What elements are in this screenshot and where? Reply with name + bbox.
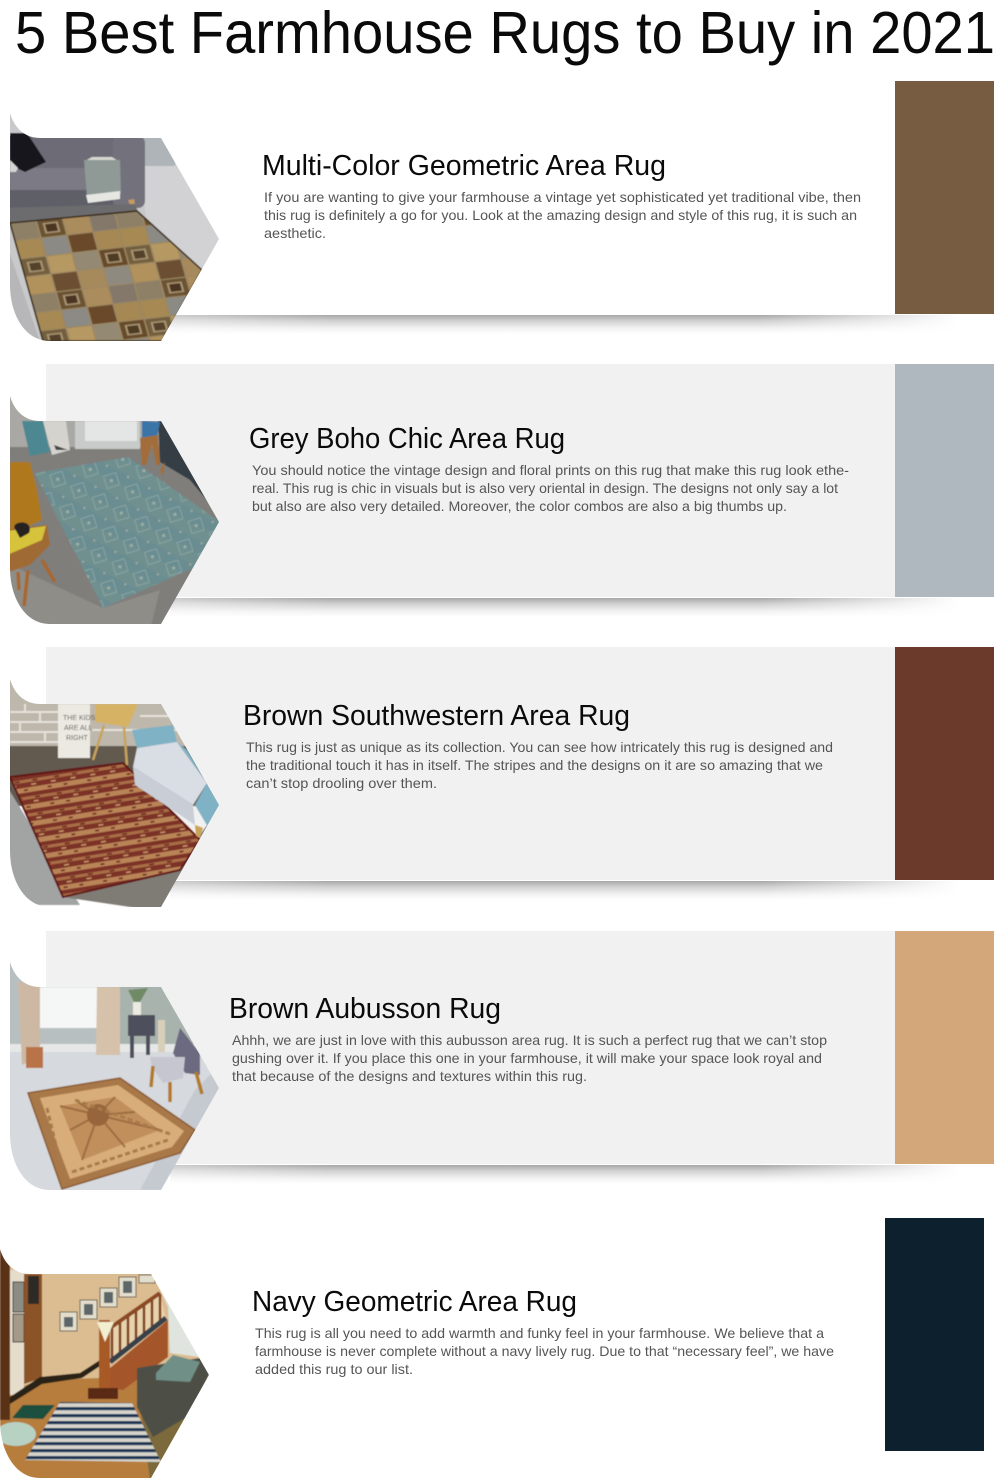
description: You should notice the vintage design and floral prints on this rug that make this rug look ethe- — [252, 462, 849, 478]
description: the traditional touch it has in itself. The stripes and the designs on it are so amazing that we — [246, 757, 823, 773]
description: farmhouse is never complete without a navy lively rug. Due to that “necessary feel”, we have — [255, 1343, 834, 1359]
panel: Multi-Color Geometric Area Rug — [0, 81, 994, 345]
description: but also are also very detailed. Moreover, the color combos are also a big thumbs up. — [252, 498, 787, 514]
description: This rug is just as unique as its collection. You can see how intricately this rug is designed and — [246, 739, 833, 755]
description: aesthetic. — [264, 225, 326, 241]
description: added this rug to our list. — [255, 1361, 413, 1377]
description: If you are wanting to give your farmhouse a vintage yet sophisticated yet traditional vibe, then — [264, 189, 861, 205]
panel shadow — [170, 881, 940, 896]
rug photo: aubusson rug — [10, 962, 219, 1190]
heading: Grey Boho Chic Area Rug — [249, 423, 565, 455]
panel shadow — [170, 315, 940, 330]
rug photo: striped navy rug in hallway — [0, 1245, 215, 1478]
description: that because of the designs and textures within this rug. — [232, 1068, 587, 1084]
description — [255, 1325, 834, 1377]
panel background — [46, 931, 895, 1164]
description: Ahhh, we are just in love with this aubusson area rug. It is such a perfect rug that we can’t stop — [232, 1032, 827, 1048]
rug photo: teal boho rug — [0, 395, 225, 630]
panel background — [46, 647, 895, 880]
panel shadow — [170, 1165, 940, 1180]
description: can’t stop drooling over them. — [246, 775, 437, 791]
rug photo: southwestern rug: ARE ALL — [64, 725, 93, 732]
colour swatch: dark brown — [895, 647, 994, 880]
rug photo: southwestern rug: THE KIDS — [63, 715, 96, 722]
rug photo: southwestern rug — [0, 678, 225, 910]
description: gushing over it. If you place this one in your farmhouse, it will make your space look royal and — [232, 1050, 822, 1066]
colour swatch: grey blue — [895, 364, 994, 597]
description — [252, 462, 849, 514]
panel: Brown Southwestern Area Rug — [0, 647, 994, 910]
heading: Brown Aubusson Rug — [229, 993, 501, 1025]
colour swatch: brown — [895, 81, 994, 314]
description — [232, 1032, 827, 1084]
panel: Navy Geometric Area Rug — [0, 1218, 984, 1478]
panel background — [46, 364, 895, 597]
description: This rug is all you need to add warmth and funky feel in your farmhouse. We believe that a — [255, 1325, 824, 1341]
panel: Brown Aubusson Rug — [0, 931, 994, 1197]
colour swatch: navy — [885, 1218, 984, 1451]
description: this rug is definitely a go for you. Look at the amazing design and style of this rug, it is such an — [264, 207, 857, 223]
rug photo: geometric rug in living room — [10, 114, 219, 341]
heading: Navy Geometric Area Rug — [252, 1286, 577, 1318]
panel: Grey Boho Chic Area Rug — [0, 364, 994, 630]
colour swatch: tan — [895, 931, 994, 1164]
description: real. This rug is chic in visuals but is also very oriental in design. The designs not only say a lot — [252, 480, 838, 496]
heading: Multi-Color Geometric Area Rug — [262, 150, 666, 182]
description — [264, 189, 861, 241]
rug photo: southwestern rug: RIGHT — [66, 735, 88, 742]
panel shadow — [170, 598, 940, 614]
heading: Brown Southwestern Area Rug — [243, 700, 630, 732]
description — [246, 739, 833, 791]
